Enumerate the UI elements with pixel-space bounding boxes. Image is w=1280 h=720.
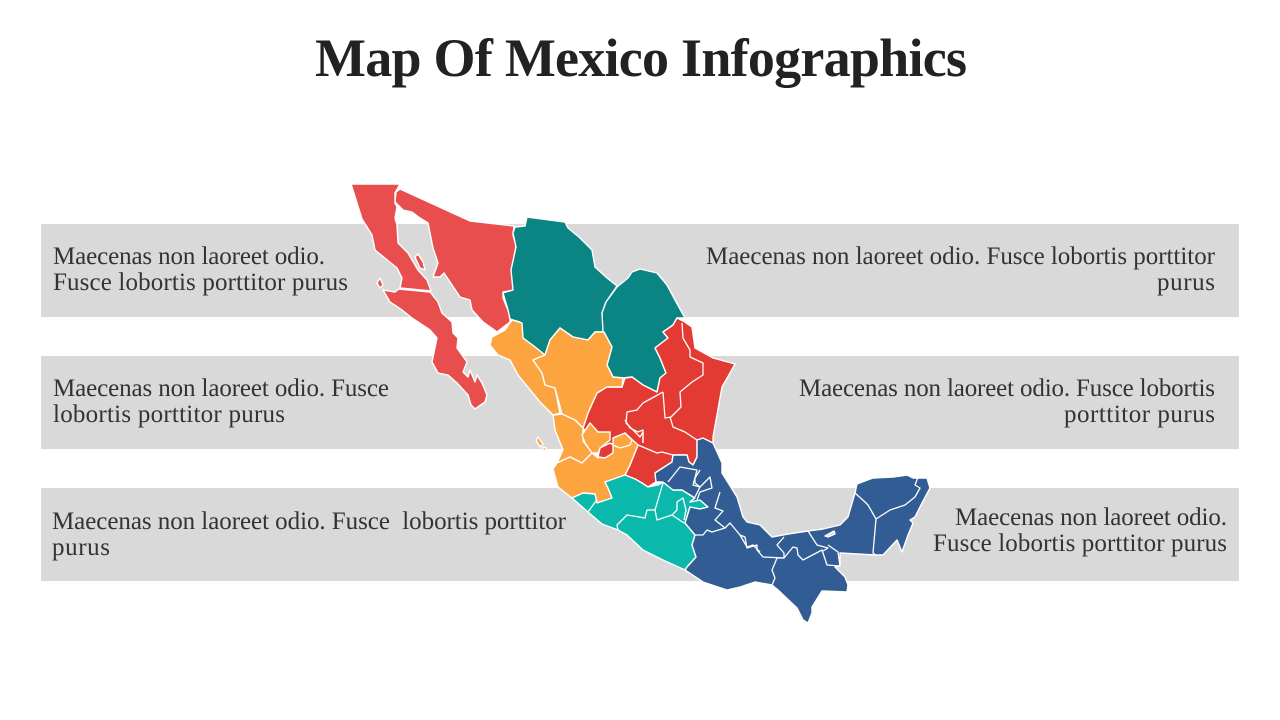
region: northwest (coral)	[351, 184, 516, 409]
text block: bottom right: Fusce lobortis porttitor purus	[933, 530, 1227, 557]
text block: middle right: porttitor purus	[1064, 401, 1215, 428]
text block: bottom left: Maecenas non laoreet odio. Fusce lobortis porttitor	[52, 508, 567, 535]
text block: middle left: Maecenas non laoreet odio. Fusce	[53, 375, 389, 402]
panel: top row bar	[41, 224, 1239, 317]
text block: middle left: lobortis porttitor purus	[53, 401, 285, 428]
region: west (orange)	[490, 320, 638, 503]
panel: middle row bar	[41, 356, 1239, 449]
text block: bottom right: Maecenas non laoreet odio.	[955, 504, 1227, 531]
text block: top left	[53, 243, 348, 296]
text block: middle right: Maecenas non laoreet odio. Fusce lobortis	[799, 375, 1215, 402]
lagoon	[825, 531, 835, 537]
text block: top right	[706, 243, 1216, 296]
region: north (dark teal)	[503, 217, 685, 392]
text block: middle right	[799, 375, 1215, 428]
text block: top left: Fusce lobortis porttitor purus	[53, 269, 348, 296]
region: south (bright teal)	[572, 475, 708, 570]
text block: top right: Maecenas non laoreet odio. Fusce lobortis porttitor	[706, 243, 1216, 270]
map of Mexico	[351, 184, 930, 623]
text block: top left: Maecenas non laoreet odio.	[53, 243, 325, 270]
title: Map Of Mexico Infographics	[315, 28, 967, 88]
text block: bottom left: purus	[52, 534, 110, 561]
text block: bottom right	[933, 504, 1227, 557]
region: red pocket	[598, 443, 613, 458]
text block: middle left	[53, 375, 389, 428]
region: southeast (blue)	[655, 438, 930, 623]
panel: bottom row bar	[41, 488, 1239, 581]
region: north-east centre (red)	[583, 318, 735, 487]
text block: top right: purus	[1157, 269, 1215, 296]
text block: bottom left	[52, 508, 567, 561]
